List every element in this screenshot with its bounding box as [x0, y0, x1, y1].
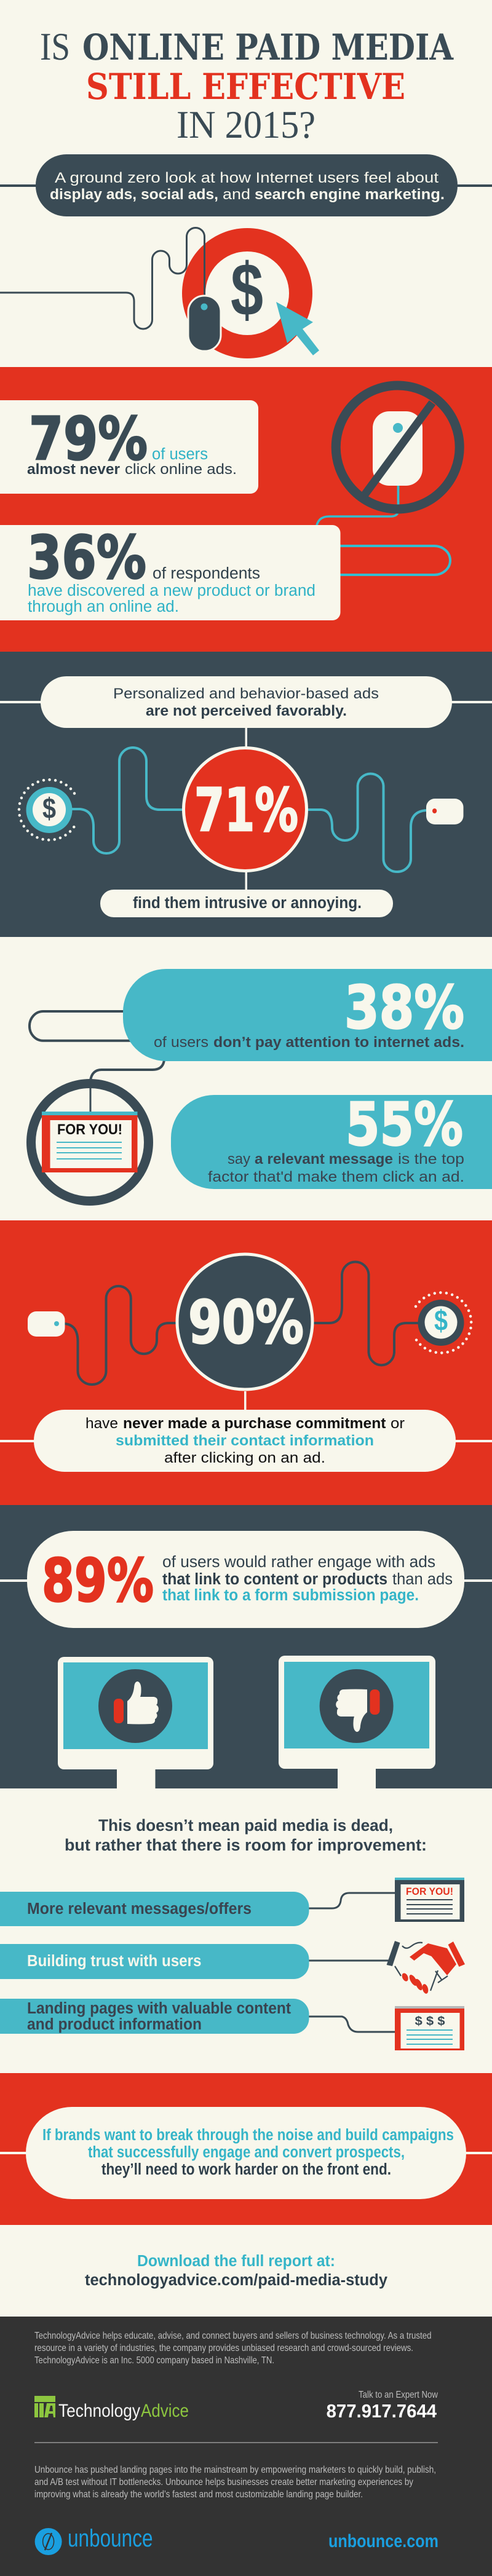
card: 79 percent: 79%	[29, 405, 148, 473]
text: contact phone	[327, 2390, 438, 2422]
card: 36 percent: through an online ad.	[28, 598, 179, 615]
text: contact phone: Talk to an Expert Now	[359, 2390, 438, 2400]
stat pill: 38 percent: don’t pay attention to internet ads.	[213, 1034, 464, 1051]
callout: 89 percent: of users would rather engage with ads	[162, 1554, 435, 1571]
subtitle pill	[0, 154, 492, 216]
icon: dollar coin	[19, 780, 74, 840]
icon: dollar coin: $	[42, 792, 56, 824]
icon: mouse	[28, 1311, 65, 1337]
stat pill: 55 percent: a relevant message	[255, 1151, 393, 1167]
callout: 89 percent: that link to content or products	[162, 1571, 387, 1588]
title: IS	[40, 25, 70, 68]
icon: pricing ad	[395, 2006, 464, 2050]
callout: that successfully engage and convert prospects,	[88, 2144, 405, 2161]
icon: monitor thumbs down	[279, 1656, 435, 1788]
card: 79 percent: almost never	[27, 461, 120, 478]
logo: Unbounce: unbounce	[68, 2525, 153, 2552]
logo: TechnologyAdvice: Advice	[141, 2401, 189, 2421]
subtitle pill: and	[223, 186, 250, 203]
card: 36 percent: of respondents	[153, 565, 260, 582]
item: landing pages: and product information	[27, 2016, 202, 2033]
top callout: Personalized and behavior-based ads	[113, 685, 379, 702]
item: building trust: Building trust with users	[27, 1953, 202, 1970]
callout: 89 percent	[0, 1531, 492, 1628]
callout: submitted their contact information	[116, 1432, 374, 1449]
text: report url: technologyadvice.com/paid-media-study	[85, 2272, 388, 2289]
title: IN 2015?	[177, 103, 315, 146]
bottom callout: find them intrusive or annoying.	[133, 895, 362, 912]
callout	[0, 1391, 492, 1472]
title: STILL EFFECTIVE	[86, 66, 405, 108]
logo: TechnologyAdvice	[34, 2396, 189, 2421]
heading	[65, 1816, 427, 1854]
stat pill: 55 percent: 55%	[346, 1090, 463, 1159]
item: landing pages	[0, 1999, 464, 2050]
text: TechnologyAdvice description: TechnologyAdvice is an Inc. 5000 company based in Nashville, TN.	[34, 2355, 274, 2366]
callout: or	[391, 1415, 405, 1432]
card: 79 percent: of users	[152, 446, 208, 463]
icon: for you ad	[395, 1878, 464, 1922]
logo: Unbounce	[35, 2525, 153, 2555]
stat circle: 90 percent	[177, 1254, 312, 1389]
icon: target with dollar, mouse and cursor	[0, 227, 319, 358]
panel: download link	[0, 2225, 492, 2317]
title	[40, 25, 454, 146]
subtitle pill: A ground zero look at how Internet users feel about	[55, 170, 438, 186]
item: relevant messages: More relevant messages/offers	[27, 1900, 252, 1918]
callout: 89 percent: than ads	[392, 1571, 453, 1588]
card: 36 percent: 36%	[27, 523, 146, 592]
bottom callout	[100, 890, 393, 917]
stat pill: 55 percent	[171, 1090, 492, 1189]
subtitle pill: search engine marketing.	[255, 186, 445, 203]
text: Unbounce description	[34, 2465, 436, 2500]
callout: 89 percent: 89%	[42, 1546, 154, 1615]
callout: they’ll need to work harder on the front end.	[101, 2161, 391, 2178]
callout: never made a purchase commitment	[123, 1415, 386, 1432]
icon: cable	[316, 486, 450, 575]
logo: TechnologyAdvice: Technology	[58, 2401, 140, 2421]
panel: room for improvement	[0, 1788, 492, 2073]
icon: cable	[30, 1011, 164, 1080]
text: TechnologyAdvice description: resource in a variety of industries, the company provides unbiased research and crowd-sourced reviews.	[34, 2343, 413, 2353]
item: relevant messages	[0, 1878, 464, 1926]
icon: target with dollar, mouse and cursor: $	[231, 248, 263, 331]
callout: 89 percent: that link to a form submission page.	[162, 1587, 419, 1604]
panel: click statistics	[0, 367, 492, 652]
card: 79 percent	[0, 400, 258, 494]
callout	[26, 2107, 466, 2199]
icon: dollar coin	[416, 1292, 471, 1353]
heading: but rather that there is room for improvement:	[65, 1836, 427, 1854]
stat pill: 55 percent: is the top	[398, 1151, 464, 1167]
chart: cables	[65, 1262, 421, 1385]
text: Unbounce description: improving what is already the world’s fastest and most customizable landing page builder.	[34, 2489, 363, 2500]
heading: This doesn’t mean paid media is dead,	[98, 1816, 393, 1835]
stat pill: 55 percent: say	[228, 1151, 251, 1167]
callout: have	[85, 1415, 118, 1432]
stat pill: 38 percent	[123, 969, 492, 1061]
panel: link preference	[0, 1505, 492, 1788]
stat circle: 71 percent: 71%	[194, 776, 298, 845]
card: 36 percent	[0, 523, 341, 620]
icon: pricing ad: $ $ $	[415, 2015, 445, 2028]
text: contact phone: 877.917.7644	[327, 2400, 437, 2422]
callout: after clicking on an ad.	[164, 1450, 325, 1466]
subtitle pill: display ads, social ads,	[50, 186, 218, 203]
stat pill: 38 percent: 38%	[344, 973, 464, 1042]
icon: handshake	[387, 1941, 465, 1994]
panel: attention and relevance	[0, 937, 492, 1220]
icon: for you ad: FOR YOU!	[406, 1886, 453, 1897]
top callout: are not perceived favorably.	[146, 703, 347, 719]
text: unbounce url: unbounce.com	[328, 2531, 438, 2551]
icon: targeted ad in ring: FOR YOU!	[57, 1121, 122, 1138]
panel: personalized ads	[0, 652, 492, 937]
panel: conclusion	[0, 2073, 492, 2225]
text: TechnologyAdvice description	[34, 2331, 432, 2366]
stat pill: 38 percent: of users	[154, 1034, 208, 1051]
stat pill: 55 percent: factor that'd make them click an ad.	[208, 1169, 464, 1185]
item: building trust	[0, 1941, 465, 1994]
panel: footer	[0, 2317, 492, 2576]
text: Unbounce description: and A/B test without IT bottlenecks. Unbounce helps businesses create better marketing experiences by	[34, 2477, 413, 2487]
chart: cables	[72, 748, 426, 872]
icon: dollar coin: $	[434, 1304, 448, 1337]
panel: intro header	[0, 0, 492, 367]
icon: targeted ad in ring	[31, 1080, 149, 1201]
panel: purchase commitment	[0, 1220, 492, 1505]
text: download prompt: Download the full report at:	[137, 2253, 335, 2270]
card: 79 percent: click online ads.	[125, 461, 237, 478]
card: 36 percent: have discovered a new product or brand	[28, 582, 315, 599]
top callout	[0, 676, 492, 890]
stat circle: 71 percent	[183, 748, 306, 871]
item: landing pages: Landing pages with valuable content	[27, 2000, 291, 2017]
stat circle: 90 percent: 90%	[188, 1288, 304, 1357]
icon: monitor thumbs up	[58, 1657, 213, 1788]
icon: mouse	[426, 799, 464, 824]
icon: prohibited mouse	[336, 385, 459, 509]
